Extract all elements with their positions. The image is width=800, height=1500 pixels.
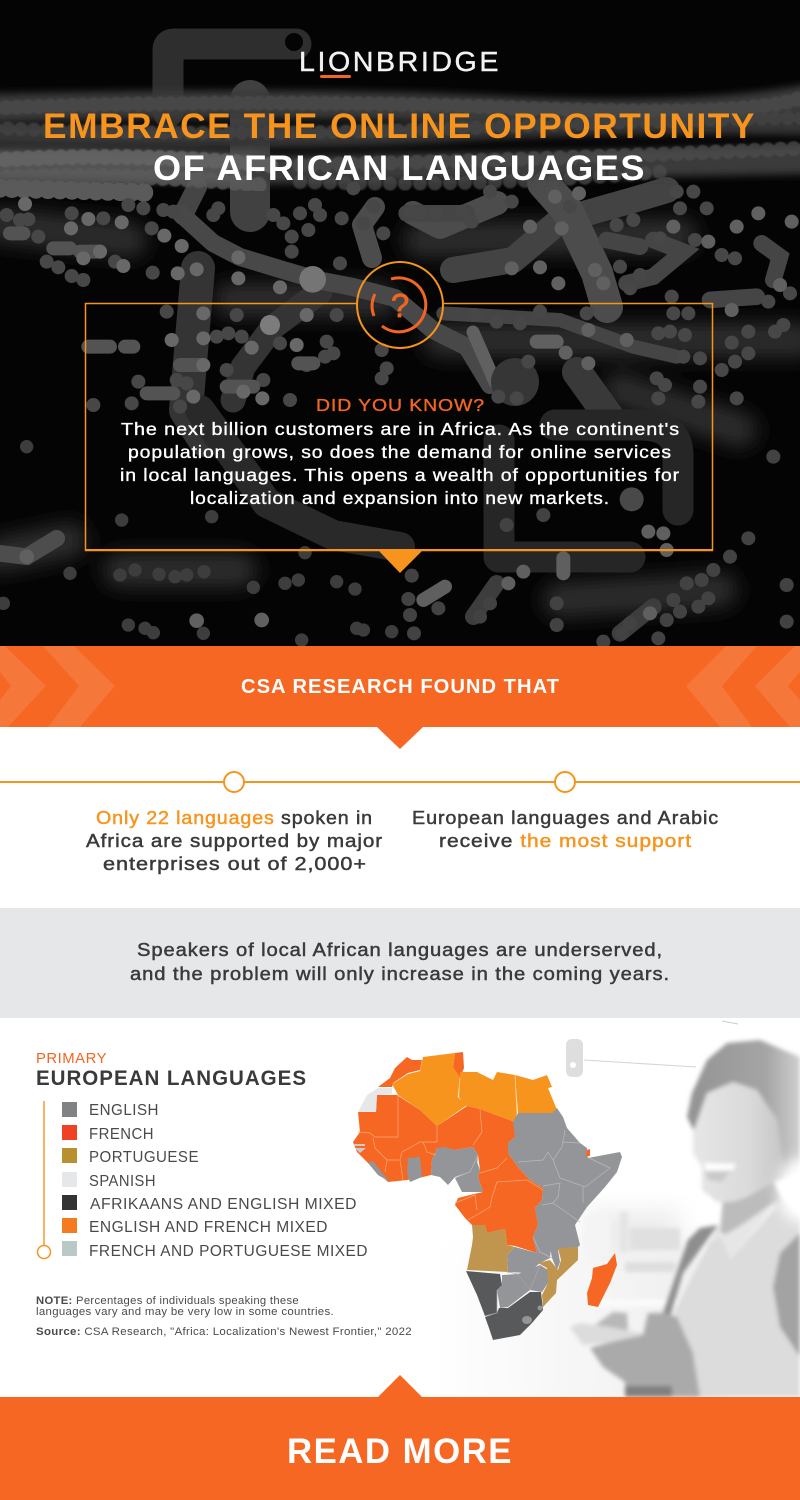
call to action: READ MORE — [287, 1432, 513, 1471]
legend swatches — [62, 1102, 77, 1256]
banner: CSA research — [0, 646, 800, 749]
hero background: bokeh dots upper band — [0, 93, 800, 186]
arm — [773, 1233, 800, 1357]
legend labels: ENGLISH AND FRENCH MIXED — [89, 1219, 328, 1236]
hero background: soft haze — [0, 225, 800, 600]
map: English and French mixed — [392, 1053, 557, 1224]
bag strap — [663, 1225, 718, 1317]
title — [43, 107, 756, 188]
legend heading — [36, 1050, 307, 1090]
hand — [590, 1313, 700, 1397]
footer pointer — [378, 1375, 422, 1397]
shirt — [673, 1198, 800, 1397]
hero background: giant logo tubes — [168, 33, 678, 557]
legend labels: PORTUGUESE — [89, 1149, 199, 1166]
finding: most support — [412, 808, 719, 851]
legend — [36, 1050, 368, 1260]
did you know text: population grows, so does the demand for online services — [128, 442, 672, 462]
title: OF AFRICAN LANGUAGES — [153, 149, 646, 188]
map: Spanish — [358, 1088, 392, 1112]
map: French speaking countries — [353, 1052, 617, 1307]
legend heading: EUROPEAN LANGUAGES — [36, 1067, 307, 1090]
legend labels: ENGLISH — [89, 1102, 159, 1119]
finding: 22 languages: enterprises out of 2,000+ — [103, 854, 367, 874]
legend labels — [89, 1102, 368, 1260]
hero background: top bokeh bands — [0, 98, 800, 170]
hero panel — [0, 0, 800, 646]
map: Djibouti — [586, 1149, 590, 1156]
grey statement panel: and the problem will only increase in the coming years. — [130, 964, 670, 984]
legend heading: PRIMARY — [36, 1050, 107, 1067]
face — [693, 1082, 787, 1202]
hero background: bokeh dots, lower right — [408, 457, 787, 642]
map: English speaking countries — [368, 1108, 622, 1308]
grey statement panel — [0, 908, 800, 1018]
note and source — [36, 1295, 412, 1338]
timeline — [0, 772, 800, 792]
legend labels: FRENCH — [89, 1126, 154, 1143]
smile — [704, 1163, 736, 1171]
hero background: bokeh dots, upper right — [407, 192, 792, 402]
map: Portuguese speaking countries — [467, 1225, 578, 1307]
chevrons left — [0, 646, 115, 727]
hair — [687, 1040, 800, 1180]
finding: 22 languages: Only 22 languages spoken in — [96, 808, 373, 828]
legend labels: AFRIKAANS AND ENGLISH MIXED — [90, 1196, 357, 1213]
map: enclaves — [522, 1306, 542, 1324]
finding: most support: European languages and Arabic — [412, 808, 719, 828]
hero background: bokeh dots, lower left — [0, 447, 392, 640]
map: Gambia and Guinea-Bissau — [353, 1144, 366, 1153]
did you know text: in local languages. This opens a wealth of opportunities for — [120, 465, 680, 485]
grey statement panel: Speakers of local African languages are underserved, — [137, 940, 663, 960]
icon: question mark: ? — [391, 287, 409, 324]
icon: question mark — [357, 262, 443, 348]
box pointer — [379, 551, 422, 573]
note and source: NOTE: Percentages of individuals speaking these — [36, 1295, 299, 1307]
sun flare — [778, 1158, 800, 1222]
legend labels: FRENCH AND PORTUGUESE MIXED — [89, 1243, 368, 1260]
note and source: languages vary and may be very low in some countries. — [36, 1306, 334, 1318]
logo: Lionbridge: LIONBRIDGE — [299, 46, 501, 77]
legend timeline — [38, 1101, 50, 1258]
parked car — [595, 1312, 628, 1333]
banner heading: CSA RESEARCH FOUND THAT — [241, 676, 560, 698]
traffic light — [566, 1021, 738, 1077]
legend labels: SPANISH — [89, 1173, 156, 1190]
finding: most support: receive the most support — [439, 831, 692, 851]
title: EMBRACE THE ONLINE OPPORTUNITY — [43, 107, 756, 146]
phone — [570, 1323, 650, 1345]
did you know text: DID YOU KNOW? — [316, 395, 485, 415]
neck — [720, 1180, 783, 1240]
map of Africa — [353, 1052, 622, 1340]
photo: woman with phone — [0, 1018, 800, 1415]
map: country borders — [358, 1075, 610, 1316]
footer: read more — [0, 1375, 800, 1500]
note and source: Source: CSA Research, "Africa: Localization's Newest Frontier," 2022 — [36, 1326, 412, 1338]
finding: 22 languages: Africa are supported by major — [86, 831, 383, 851]
map: Afrikaans and English mixed — [466, 1271, 543, 1340]
chevrons right — [686, 646, 800, 727]
did you know box — [85, 304, 713, 573]
did you know text: The next billion customers are in Africa. As the continent's — [121, 419, 680, 439]
banner pointer — [377, 727, 423, 749]
did you know text — [120, 395, 680, 508]
finding: 22 languages — [86, 808, 383, 874]
hero background: bokeh dots, upper left — [0, 188, 387, 407]
did you know text: localization and expansion into new markets. — [190, 488, 610, 508]
